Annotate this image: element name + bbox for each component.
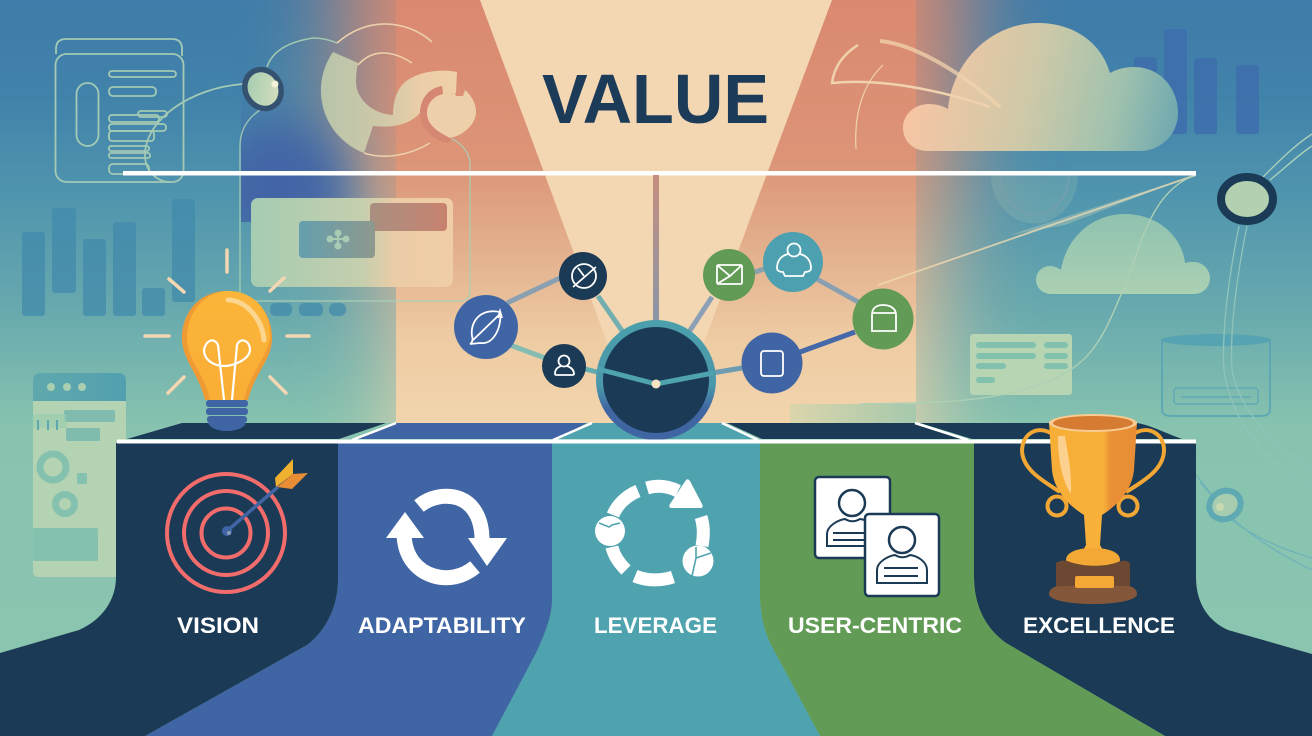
icon: large cloud [903, 23, 1178, 151]
connecting curves [860, 134, 1312, 570]
icon: leverage ring [595, 479, 714, 580]
icon: light bulb [145, 250, 309, 431]
label: leverage: LEVERAGE [594, 613, 717, 638]
icon: cross [326, 230, 350, 250]
panel: leverage [492, 443, 820, 736]
panel: adaptability [145, 443, 552, 736]
icon: trophy [1022, 414, 1164, 604]
bar chart: left [22, 199, 346, 316]
icon: small cloud [1036, 214, 1210, 294]
label: excellence: EXCELLENCE [1023, 613, 1175, 638]
icon: antenna sketch [832, 41, 1000, 149]
ghost circle [991, 175, 1078, 224]
panel: vision [0, 443, 338, 736]
icon: donut ring [321, 24, 476, 156]
icon: lens node [238, 63, 288, 115]
left background decorations [22, 24, 476, 577]
gauge hub [598, 324, 713, 436]
panel: browser card [33, 373, 126, 577]
icon: target [167, 459, 308, 592]
user card front [865, 514, 939, 596]
label: vision: VISION [177, 613, 259, 638]
panel: list card [970, 334, 1072, 395]
network connectors [507, 267, 860, 374]
icon: node person teal [763, 232, 823, 292]
icon: node mail green [703, 249, 755, 301]
blue device panel [239, 37, 471, 302]
icon: node square blue [742, 332, 802, 394]
highlight strip [790, 404, 916, 423]
icon: bulb rays [145, 250, 309, 393]
right background decorations [790, 23, 1312, 570]
icon: right lens node [1221, 177, 1273, 221]
icon: user cards [815, 477, 939, 596]
title: VALUE [542, 60, 769, 138]
platform top [127, 423, 1182, 440]
label: adaptability: ADAPTABILITY [358, 613, 526, 638]
panel: excellence [974, 443, 1312, 736]
label: user-centric: USER-CENTRIC [788, 613, 962, 638]
top white beam [123, 171, 1196, 321]
icon: node leaf dark [559, 252, 607, 300]
panel: user-centric [760, 443, 1165, 736]
icon: node leaf blue [454, 295, 518, 359]
icon: node bag green [852, 288, 914, 350]
light beam [480, 0, 832, 345]
panel: central glow [396, 0, 916, 423]
user card back [815, 477, 890, 558]
icon: cycle arrows [386, 496, 507, 578]
platform front edge [117, 440, 1196, 444]
icon: cylinder [1161, 334, 1271, 416]
bar chart: right [1134, 29, 1259, 134]
icon: document outline [56, 39, 243, 182]
icon: small lens [1205, 486, 1245, 524]
icon: node person dark [542, 344, 586, 388]
